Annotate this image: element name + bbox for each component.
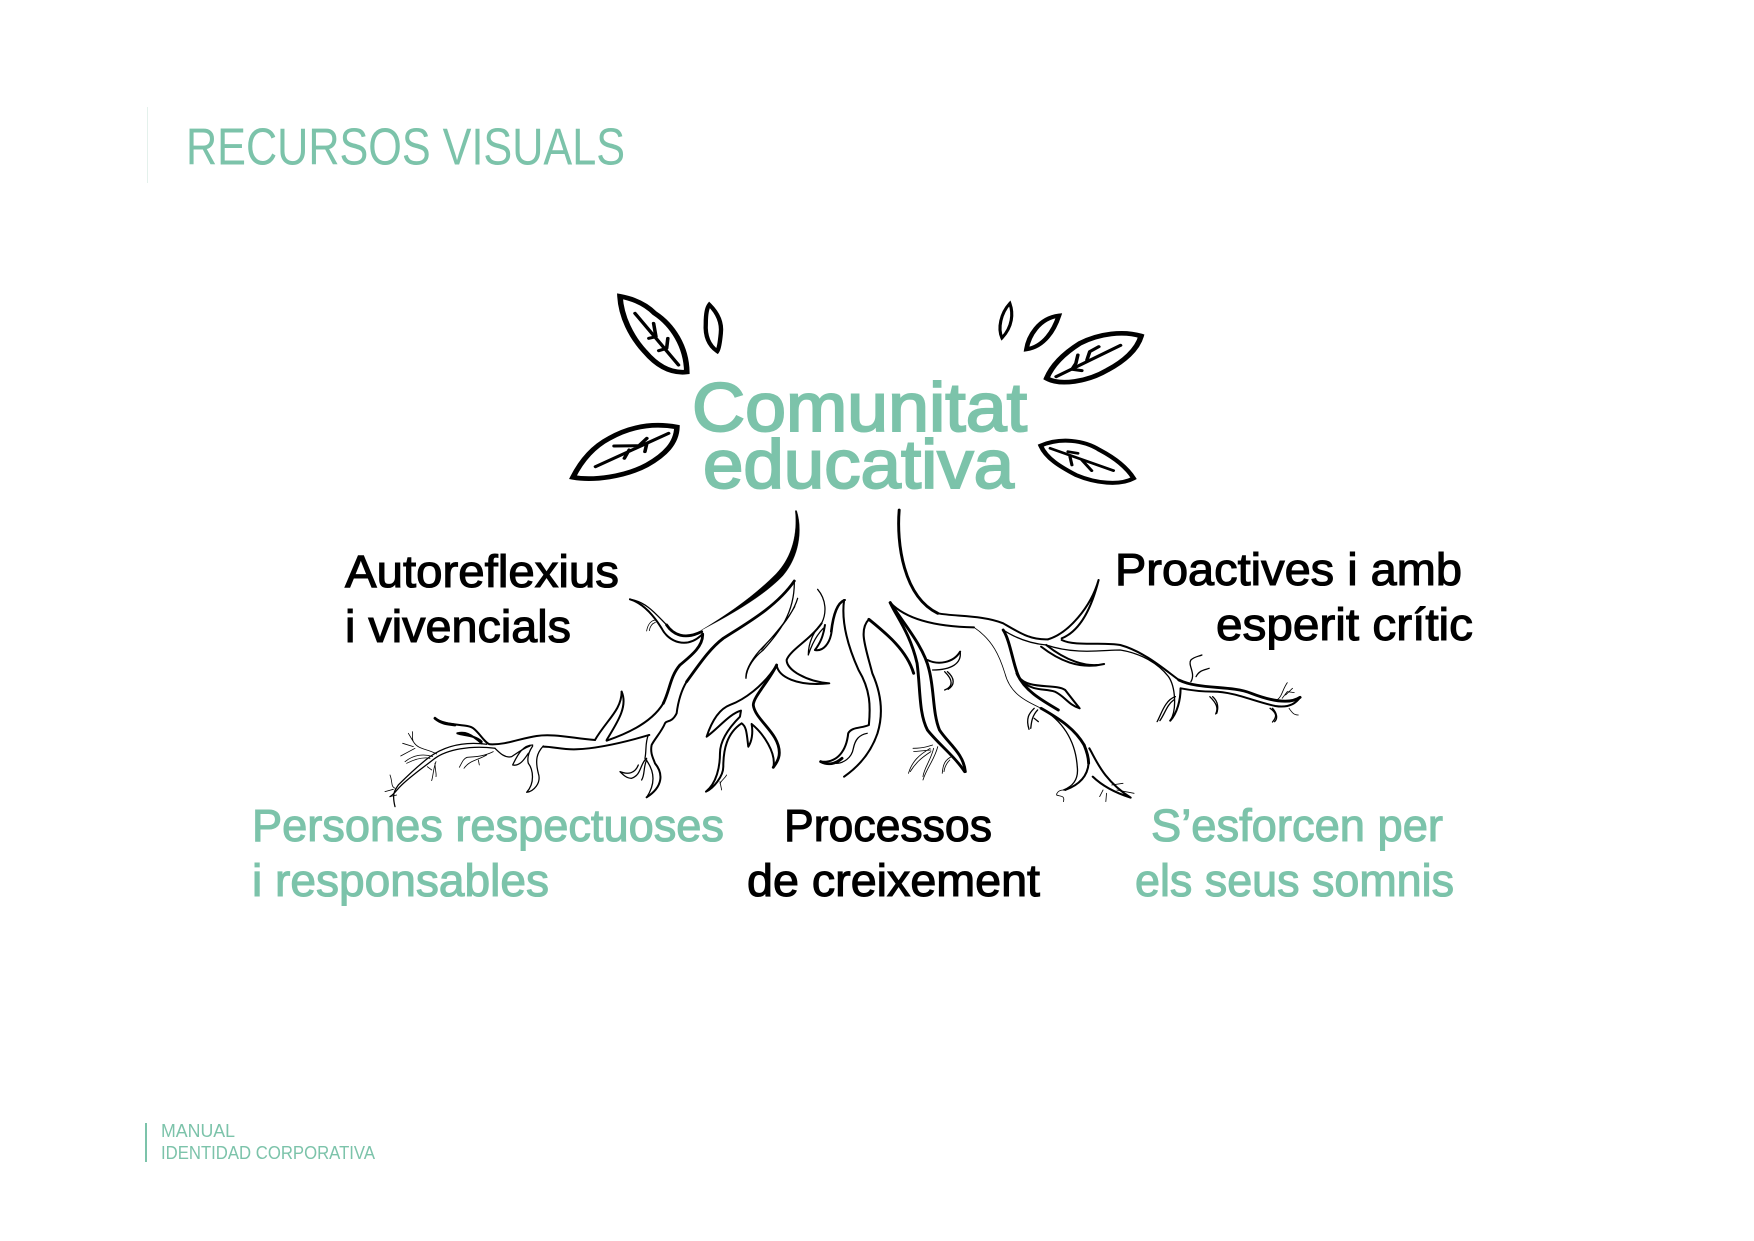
roots: left and centre [385, 511, 845, 807]
label: S'esforcen per els seus somnis: S’esforcen per [1151, 800, 1443, 851]
title: RECURSOS VISUALS [186, 118, 625, 176]
label: Autoreflexius i vivencials: i vivencials [345, 601, 571, 652]
root: centre pillar one [821, 600, 914, 777]
central heading [692, 369, 1027, 503]
root: far left branch [385, 732, 530, 807]
root: upper left curve [702, 511, 799, 630]
footer: MANUAL [161, 1120, 235, 1141]
leaf: lower left [573, 425, 677, 479]
leaf: small oval left [706, 305, 721, 351]
root: centre flame [808, 589, 845, 655]
leaf: lower right [1041, 441, 1134, 483]
root: centre pillar two [890, 603, 965, 780]
leaf: small oval right [1000, 303, 1012, 338]
label: Processos de creixement: de creixement [747, 855, 1041, 906]
label: Autoreflexius i vivencials [345, 546, 619, 652]
root: lower left rootlets [513, 745, 647, 792]
label: Proactives i amb esperit crític: Proactives i amb [1115, 544, 1462, 595]
root: left stub [630, 599, 703, 643]
central heading: educativa [703, 426, 1015, 503]
leaf: top left [620, 296, 687, 372]
label: Proactives i amb esperit crític: esperit crític [1216, 599, 1473, 650]
footer [145, 1120, 376, 1163]
root: right branch [1003, 630, 1300, 729]
leaves [573, 296, 1141, 483]
root: main trunk [435, 581, 794, 797]
label: Proactives i amb esperit crític [1115, 544, 1473, 650]
label: Persones respectuoses i responsables: Persones respectuoses [252, 800, 724, 851]
footer: IDENTIDAD CORPORATIVA [161, 1142, 376, 1163]
label: Persones respectuoses i responsables [252, 800, 724, 906]
label: S'esforcen per els seus somnis: els seus somnis [1135, 855, 1454, 906]
label: Processos de creixement [747, 800, 1041, 906]
root: centre left fork [706, 581, 829, 792]
leaf: small right [1026, 316, 1059, 349]
roots: centre and right [821, 510, 1300, 802]
label: Processos de creixement: Processos [784, 800, 992, 851]
label: S'esforcen per els seus somnis [1135, 800, 1454, 906]
leaf: upper right [1047, 333, 1141, 382]
root: main right trunk [890, 510, 1134, 802]
label: Persones respectuoses i responsables: i responsables [252, 855, 549, 906]
central heading: Comunitat [692, 369, 1027, 446]
label: Autoreflexius i vivencials: Autoreflexius [345, 546, 619, 597]
